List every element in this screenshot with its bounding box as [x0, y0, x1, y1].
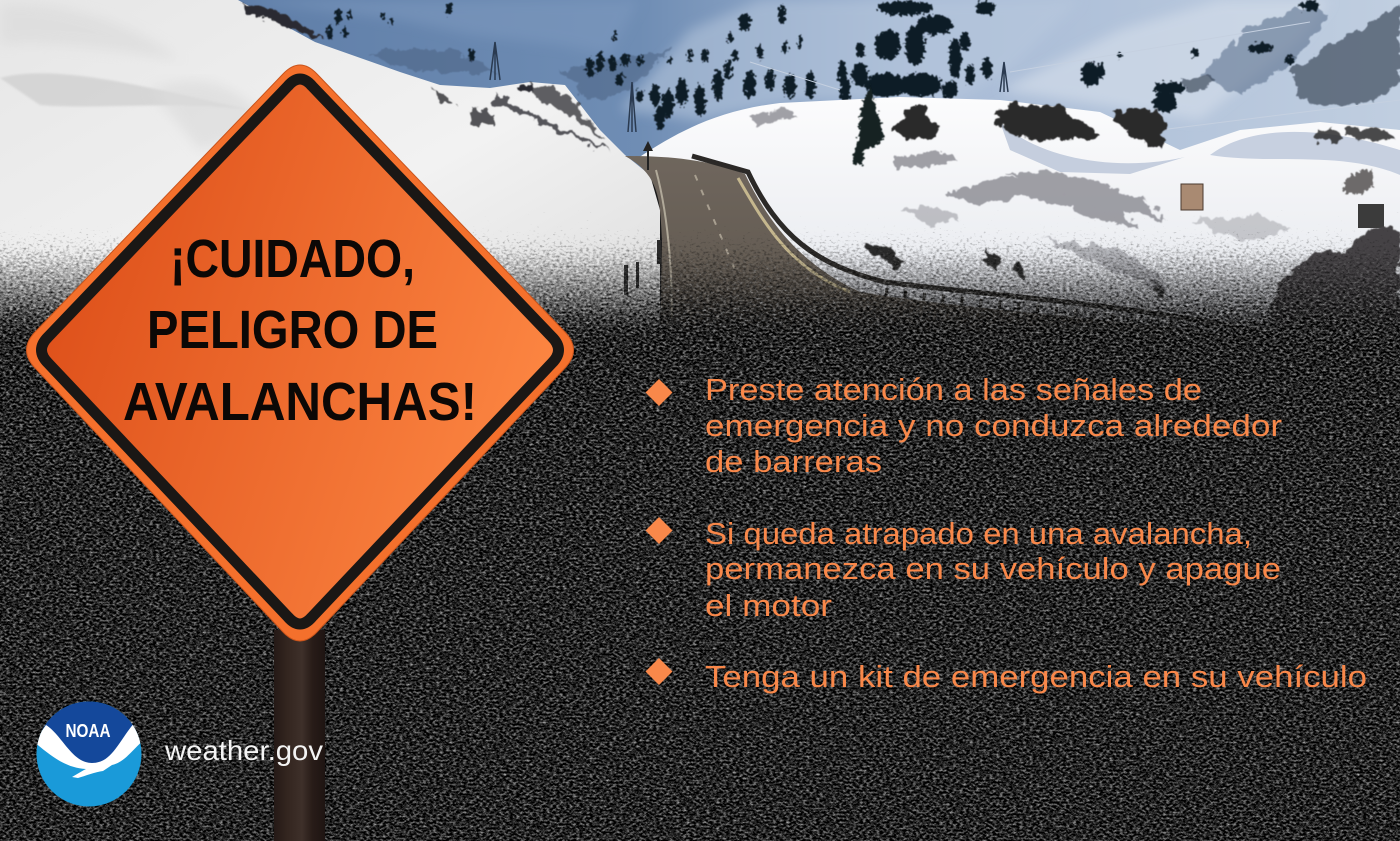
- delineators: [624, 240, 661, 295]
- tip 2: el motor: [705, 588, 832, 623]
- bullet diamond: [646, 379, 672, 406]
- background: snowy mountain road photo: [0, 0, 1400, 370]
- bullet diamond: [646, 658, 672, 685]
- sign text: PELIGRO DE: [147, 300, 438, 360]
- orange diamond warning sign: [26, 65, 574, 641]
- rocks along left ridge: [240, 4, 609, 152]
- tip 2: [646, 516, 1281, 623]
- road sign post: [643, 141, 653, 170]
- tip 1: emergencia y no conduzca alrededor: [705, 408, 1282, 443]
- asphalt texture overlay fading up into photo: [0, 210, 1400, 841]
- power lines and pylons: [490, 22, 1400, 132]
- tip 3: Tenga un kit de emergencia en su vehículo: [705, 659, 1367, 694]
- website label: weather.gov: [164, 735, 323, 766]
- tip 1: Preste atención a las señales de: [705, 372, 1202, 407]
- wooden hut signs: [1181, 184, 1203, 210]
- shrubs: [1342, 170, 1374, 194]
- bullet diamond: [646, 517, 672, 544]
- tip 1: [646, 372, 1282, 479]
- right snow hills: [638, 97, 1400, 370]
- sign post: [274, 630, 325, 841]
- guard rail: [692, 156, 1340, 350]
- sign text: ¡CUIDADO,: [170, 229, 415, 289]
- tree clusters: [327, 1, 1320, 130]
- dark rocks on hillside: [864, 104, 1396, 300]
- tip 1: de barreras: [705, 444, 882, 479]
- NOAA logo: NOAA: [66, 721, 110, 741]
- left snow slope: [0, 0, 660, 370]
- sign board: [26, 65, 574, 641]
- distant blue mountains with fir trees: [230, 0, 1400, 175]
- sign black border: [42, 79, 558, 624]
- winding road: [625, 156, 1340, 352]
- sign text: AVALANCHAS!: [123, 372, 477, 432]
- tip 2: Si queda atrapado en una avalancha,: [705, 516, 1252, 551]
- tip 2: permanezca en su vehículo y apague: [705, 551, 1281, 586]
- sign text: [123, 229, 477, 432]
- NOAA logo: [36, 702, 142, 806]
- fir tree: [852, 85, 884, 166]
- safety tips list: [646, 372, 1367, 694]
